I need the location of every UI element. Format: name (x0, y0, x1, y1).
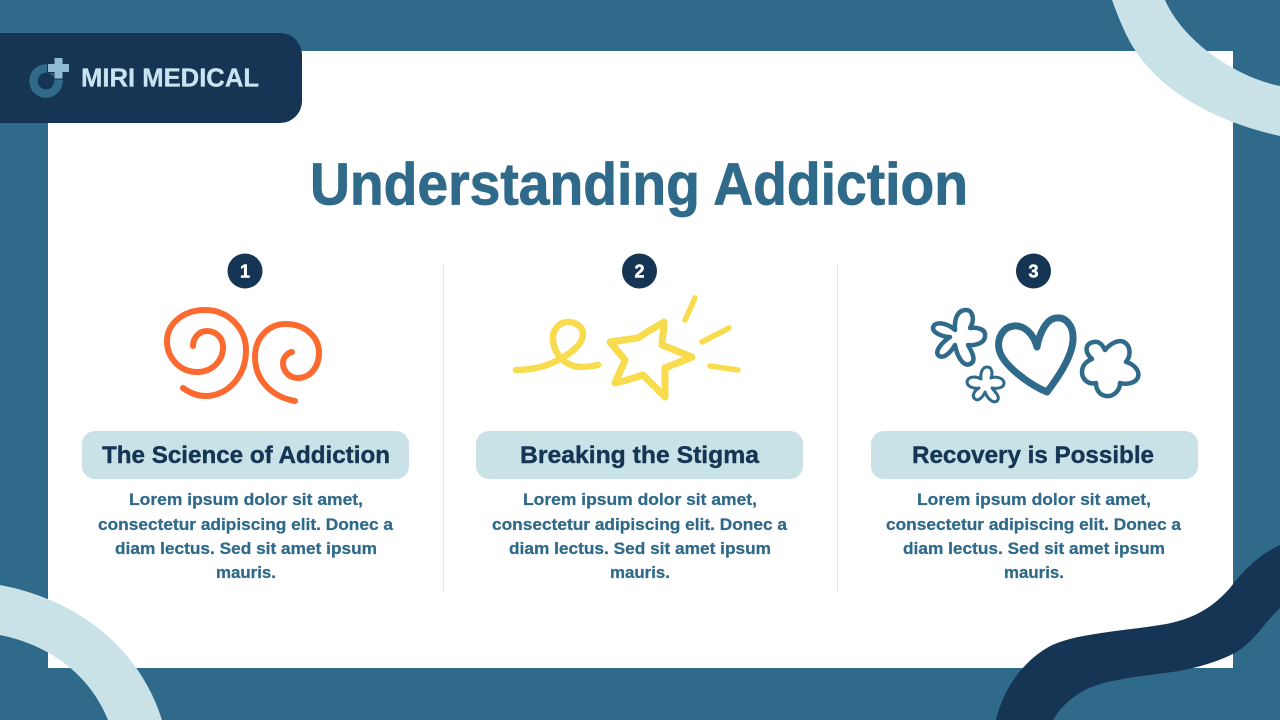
brand header (0, 33, 302, 123)
body text: diam lectus. Sed sit amet ipsum (903, 540, 1165, 558)
number badge 1: 1 (240, 262, 250, 282)
body text: Lorem ipsum dolor sit amet, (523, 491, 757, 509)
icon: yellow star with squiggle (516, 298, 738, 397)
corner arc: top right (1112, 0, 1280, 136)
body text: consectetur adipiscing elit. Donec a (886, 516, 1182, 534)
brand name: MIRI MEDICAL (81, 62, 259, 92)
body text (492, 491, 788, 582)
number badge 3: 3 (1028, 262, 1039, 282)
icon: heart and flowers (933, 310, 1138, 402)
panel: recovery is possible (871, 254, 1198, 582)
icon: orange spirals (167, 310, 319, 401)
body text: consectetur adipiscing elit. Donec a (98, 516, 394, 534)
body text: diam lectus. Sed sit amet ipsum (115, 540, 377, 558)
body text: consectetur adipiscing elit. Donec a (492, 516, 788, 534)
body text: mauris. (216, 564, 276, 582)
number badge 2: 2 (634, 262, 645, 282)
number badge 1 (228, 254, 262, 288)
divider line 1 (443, 264, 444, 592)
number badge 2 (622, 254, 657, 288)
body text: mauris. (1004, 564, 1064, 582)
body text: mauris. (610, 564, 670, 582)
corner arc: bottom left (0, 585, 162, 720)
white content panel (48, 51, 1233, 668)
heading pill (871, 431, 1198, 479)
heading pill: The Science of Addiction (102, 442, 390, 469)
brand band (0, 33, 302, 123)
body text: Lorem ipsum dolor sit amet, (917, 491, 1151, 509)
number badge 3 (1016, 254, 1051, 288)
body text (98, 491, 394, 582)
divider line 2 (837, 264, 838, 592)
icon: medical cross logo (34, 58, 69, 94)
body text (886, 491, 1182, 582)
heading pill (476, 431, 803, 479)
body text: Lorem ipsum dolor sit amet, (129, 491, 363, 509)
title: Understanding Addiction (310, 152, 968, 218)
panel: breaking the stigma (476, 254, 803, 582)
heading pill: Recovery is Possible (912, 442, 1154, 469)
heading pill: Breaking the Stigma (520, 442, 760, 469)
body text: diam lectus. Sed sit amet ipsum (509, 540, 771, 558)
panel: the science of addiction (82, 254, 409, 582)
corner wave: bottom right (996, 545, 1280, 720)
heading pill (82, 431, 409, 479)
